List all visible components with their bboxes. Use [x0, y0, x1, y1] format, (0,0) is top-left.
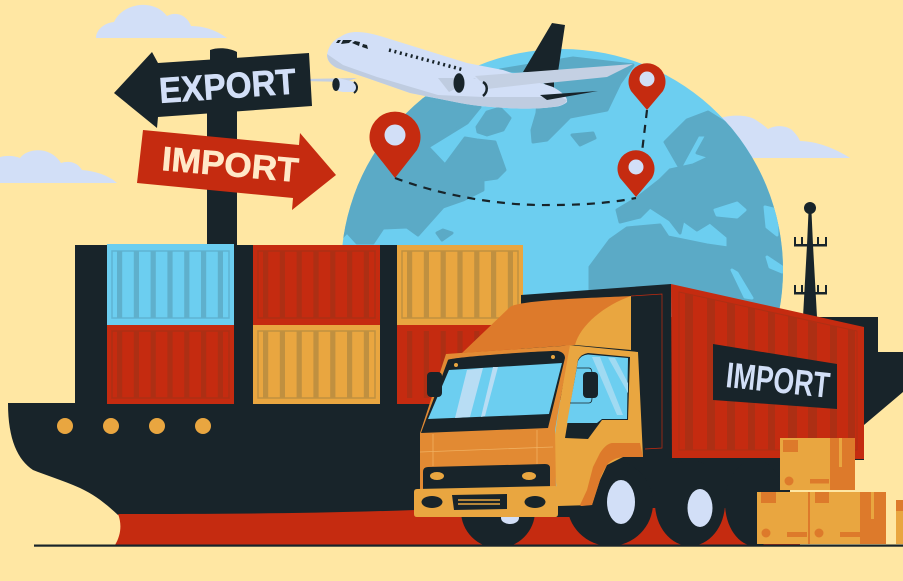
truck [414, 284, 864, 548]
icon: location pin europe [618, 150, 654, 197]
truck sign: import: IMPORT [724, 354, 832, 406]
box: lower left [757, 492, 808, 544]
container: orange lower middle [253, 325, 380, 404]
sign: import arrow: IMPORT [160, 140, 300, 190]
icon: location pin west [370, 112, 420, 178]
globe [330, 49, 800, 491]
truck bumper [414, 486, 558, 517]
truck cab [420, 296, 643, 506]
box: lower right [808, 492, 886, 544]
containers [107, 244, 523, 404]
sign: export arrow [114, 52, 312, 128]
sign: export arrow: EXPORT [158, 61, 297, 111]
ship hull [8, 317, 903, 545]
ship portholes [57, 418, 211, 434]
ground line [34, 544, 903, 547]
box: top [780, 438, 855, 490]
icon: location pin north [628, 63, 666, 110]
airplane [303, 23, 633, 109]
container: red lower left [107, 325, 234, 404]
signpost pole [207, 48, 237, 245]
truck chassis [600, 458, 790, 508]
container: red upper middle [253, 245, 380, 325]
container: blue [107, 244, 234, 325]
container: red lower right [397, 325, 523, 404]
clouds [0, 5, 850, 183]
cardboard boxes [757, 438, 903, 544]
container: orange upper right [397, 245, 523, 325]
ship superstructure behind containers [75, 245, 523, 405]
ship mast [794, 202, 827, 317]
truck cargo box [521, 284, 864, 459]
box: far right [896, 500, 903, 544]
sign: import arrow [137, 130, 336, 210]
route: dashed flight path [395, 110, 647, 205]
truck wheels [462, 480, 764, 544]
truck sign: import [713, 344, 837, 409]
